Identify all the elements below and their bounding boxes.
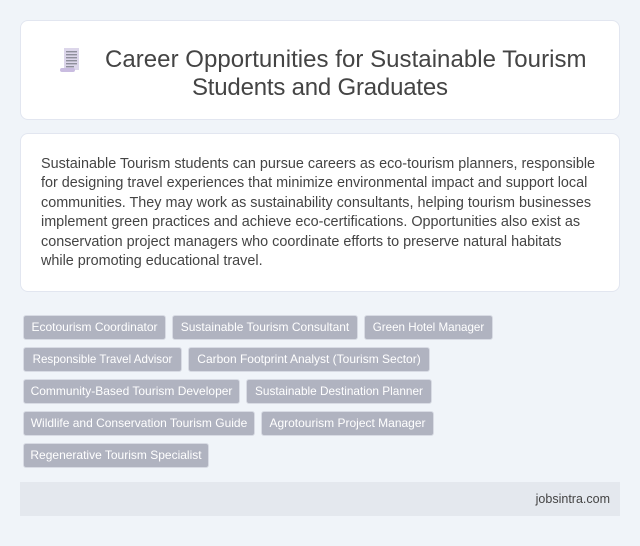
tag (23, 315, 166, 340)
tag: Green Hotel Manager (373, 321, 484, 334)
tag (23, 443, 209, 468)
tag: Responsible Travel Advisor (33, 353, 172, 366)
tag (23, 347, 182, 372)
tag: Ecotourism Coordinator (31, 320, 158, 334)
panel: title card (20, 20, 620, 120)
tag (188, 347, 430, 372)
title: Students and Graduates (192, 74, 448, 101)
description text: for designing travel experiences that minimize environmental impact and support local (41, 175, 587, 191)
tag: Community-Based Tourism Developer (31, 384, 232, 398)
description text: Sustainable Tourism students can pursue careers as eco-tourism planners, responsible (41, 156, 595, 172)
tag (246, 379, 432, 404)
title (105, 46, 587, 101)
tag: Regenerative Tourism Specialist (30, 448, 202, 462)
description text: while promoting educational travel. (41, 253, 263, 269)
tag (261, 411, 434, 436)
tag (172, 315, 358, 340)
tag: Agrotourism Project Manager (269, 416, 426, 430)
career tags (23, 315, 493, 468)
tag (23, 379, 240, 404)
footer bar (20, 482, 620, 516)
tag: Sustainable Destination Planner (255, 384, 423, 398)
title: Career Opportunities for Sustainable Tourism (105, 46, 587, 73)
icon: document scroll (60, 48, 79, 72)
description text (41, 156, 595, 269)
description text: implement green practices and achieve eco-certifications. Opportunities also exist as (41, 214, 580, 230)
tag: Sustainable Tourism Consultant (181, 320, 349, 334)
description text: communities. They may work as sustainability consultants, helping tourism businesses (41, 195, 591, 211)
footer source: jobsintra.com (536, 492, 610, 506)
description text: conservation project managers who coordinate efforts to preserve natural habitats (41, 234, 562, 250)
tag: Wildlife and Conservation Tourism Guide (31, 416, 247, 430)
panel: description (20, 133, 620, 292)
tag: Carbon Footprint Analyst (Tourism Sector) (197, 352, 421, 366)
tag (364, 315, 493, 340)
tag (23, 411, 255, 436)
